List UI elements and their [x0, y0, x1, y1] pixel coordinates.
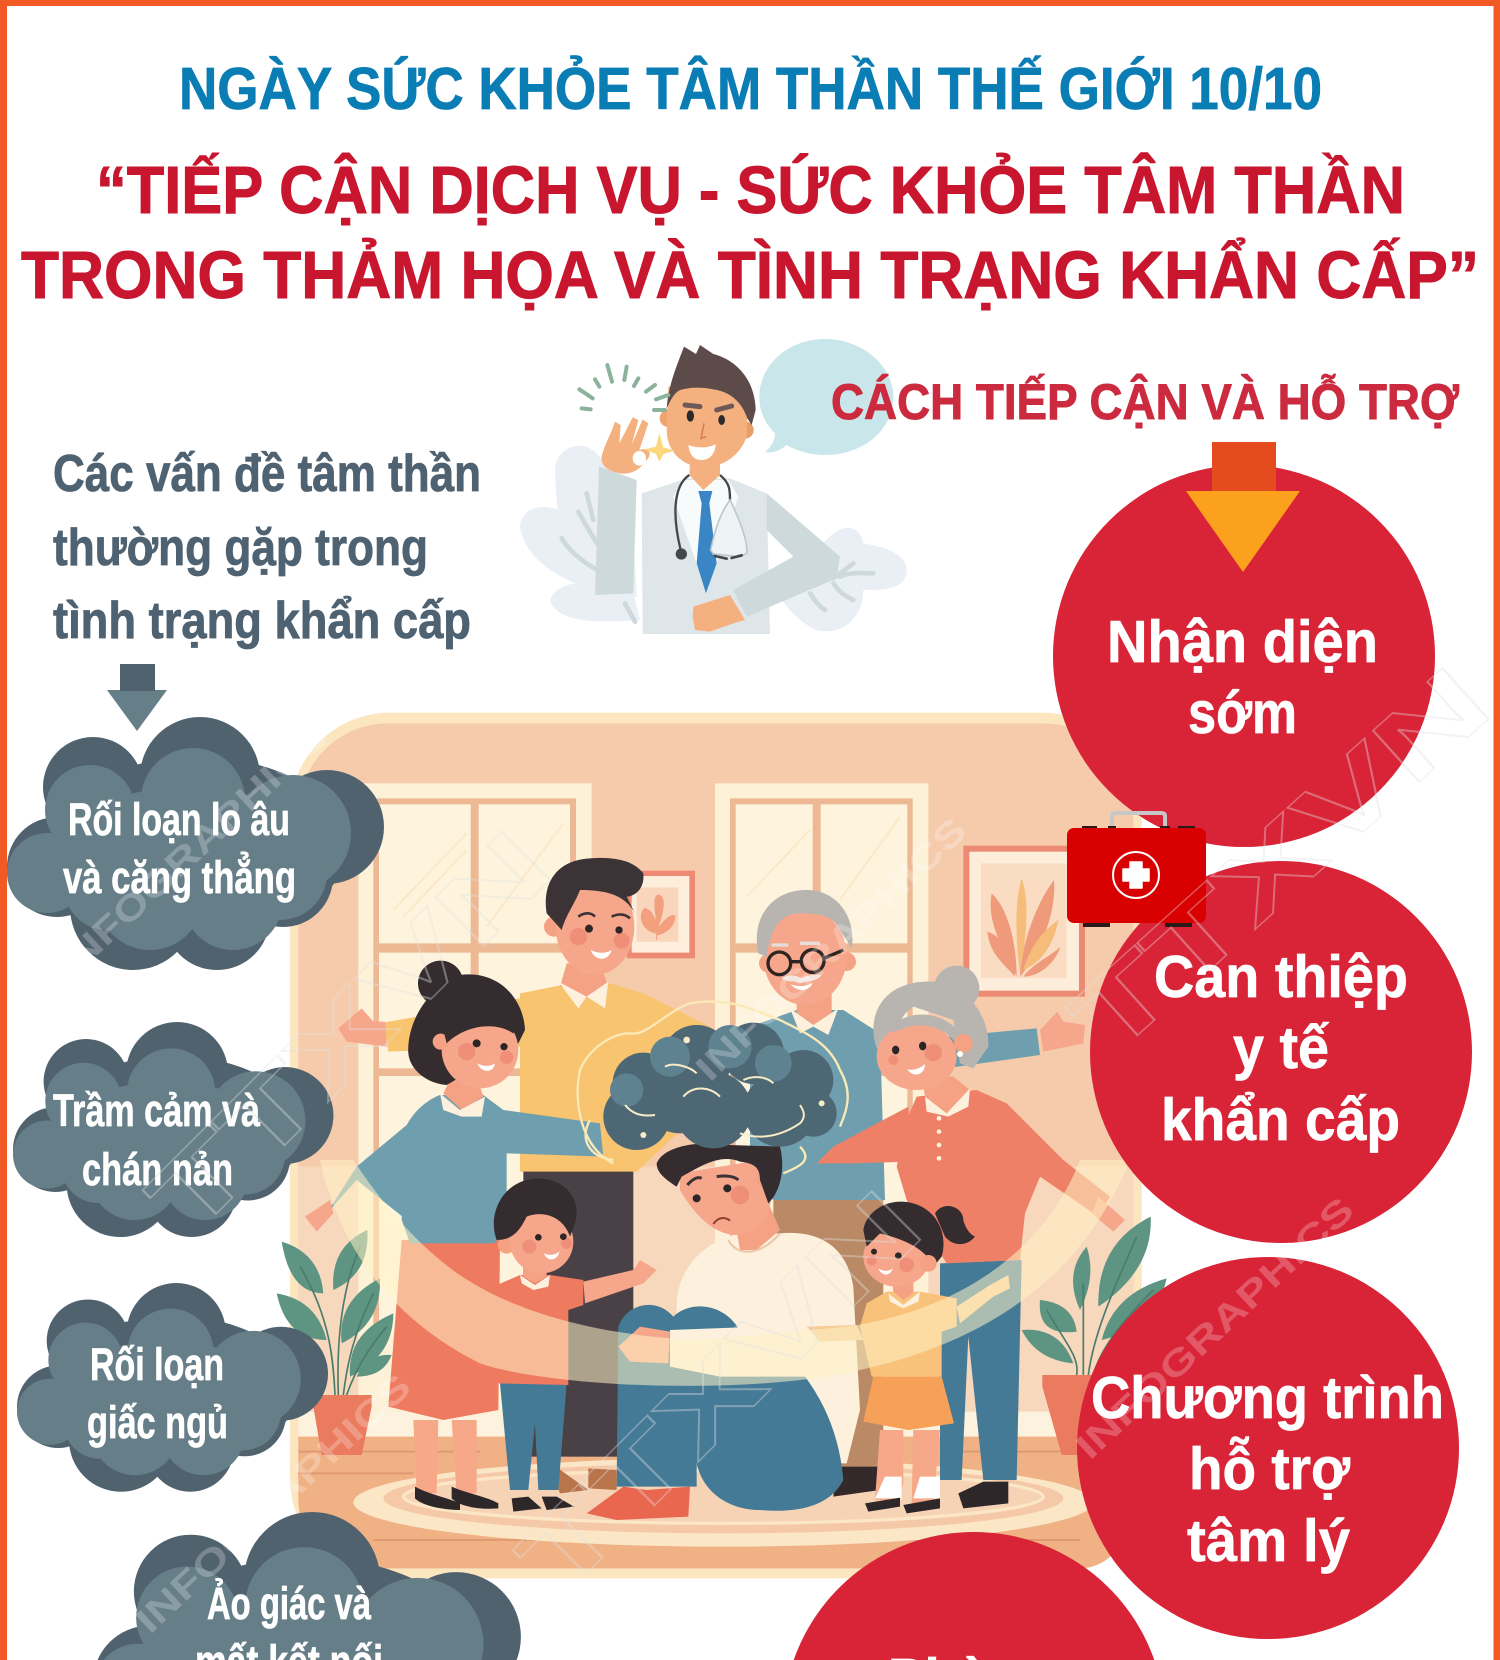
cloud: sleep disorders: giấc ngủ	[87, 1397, 228, 1448]
plant left	[277, 1230, 393, 1455]
cloud: anxiety and stress: và căng thẳng	[63, 852, 296, 903]
cloud: hallucinations and disconnection	[93, 1512, 521, 1660]
boy	[493, 1178, 657, 1512]
grandfather	[750, 890, 1085, 1497]
heading: theme of the year: “TIẾP CẬN DỊCH VỤ - SỨC KHỎE TÂM THẦN	[96, 153, 1405, 228]
neck	[689, 462, 720, 490]
cloud: depression: Trầm cảm và	[53, 1085, 261, 1136]
small picture	[627, 871, 695, 958]
circle: emergency medical intervention	[1090, 861, 1472, 1243]
distressed man	[587, 1143, 860, 1520]
watermarks: INFOGRAPHICS	[49, 714, 336, 985]
watermarks: INFOGRAPHICS	[687, 809, 975, 1089]
mother	[305, 961, 603, 1510]
speech bubble	[759, 339, 893, 455]
arrow: into approach list	[1186, 442, 1300, 572]
window right	[715, 783, 928, 1412]
heading: theme of the year	[21, 153, 1479, 313]
watermarks: INFOGRAPHICS	[127, 1365, 419, 1641]
illustration: family embracing a distressed man	[277, 713, 1167, 1578]
wainscot and floor	[298, 1412, 1133, 1437]
watermarks: INFOGRAPHICS	[1067, 1189, 1362, 1467]
icon: first aid kit	[1067, 813, 1206, 925]
plant right	[1022, 1217, 1167, 1455]
watermarks: TTXVN	[1050, 645, 1500, 1076]
circle: early recognition: Nhận diện	[1107, 609, 1378, 675]
circle: emergency medical intervention: khẩn cấp	[1161, 1087, 1400, 1153]
circle: psychological support programmes: hỗ trợ	[1189, 1436, 1350, 1502]
cloud: depression	[13, 1022, 333, 1237]
watermarks: TTXVN	[496, 1169, 943, 1616]
translucent embrace band	[320, 1160, 1130, 1386]
arrow: into issues list	[107, 664, 167, 731]
head	[660, 410, 677, 427]
text block: common mental issues	[53, 445, 481, 650]
girl	[807, 1202, 1010, 1513]
cloud: anxiety and stress: Rối loạn lo âu	[68, 794, 290, 845]
tie	[697, 491, 717, 593]
room	[290, 713, 1142, 1578]
grandmother	[817, 966, 1125, 1508]
illustration: doctor with speech bubble	[520, 339, 907, 634]
circle: psychological support programmes: Chương trình	[1091, 1365, 1444, 1431]
circle: early recognition	[1053, 465, 1435, 847]
circle: early recognition: sớm	[1188, 680, 1297, 746]
circle: emergency medical intervention: Can thiệp	[1154, 944, 1408, 1010]
storm cloud over the man's head	[578, 1002, 848, 1173]
watermarks: TTXVN	[126, 809, 573, 1256]
title: world mental health day: NGÀY SỨC KHỎE TÂM THẦN THẾ GIỚI 10/10	[179, 55, 1322, 122]
circle: prevention	[794, 1532, 1154, 1660]
cloud: depression: chán nản	[82, 1144, 233, 1195]
watermarks	[49, 645, 1500, 1641]
leaves	[520, 446, 907, 631]
cloud: hallucinations and disconnection: Ảo giác và	[207, 1578, 372, 1629]
hand	[601, 417, 650, 474]
text block: common mental issues: Các vấn đề tâm thần	[53, 445, 481, 503]
circle: emergency medical intervention: y tế	[1233, 1015, 1329, 1081]
stethoscope	[675, 475, 730, 550]
circle: psychological support programmes	[1077, 1257, 1459, 1639]
cloud: sleep disorders: Rối loạn	[90, 1339, 224, 1390]
text block: common mental issues: thường gặp trong	[53, 519, 428, 577]
cloud: sleep disorders	[17, 1283, 328, 1492]
coat	[642, 478, 770, 634]
father	[338, 858, 713, 1493]
large picture	[963, 846, 1085, 997]
rug	[353, 1458, 1093, 1547]
text block: common mental issues: tình trạng khẩn cấp	[53, 592, 471, 650]
cloud: anxiety and stress	[7, 717, 384, 970]
window left	[358, 783, 592, 1412]
sparkle ticks	[579, 365, 668, 410]
circle: psychological support programmes: tâm lý	[1187, 1508, 1350, 1574]
subheading: approach and support: CÁCH TIẾP CẬN VÀ HỖ TRỢ	[831, 374, 1459, 430]
